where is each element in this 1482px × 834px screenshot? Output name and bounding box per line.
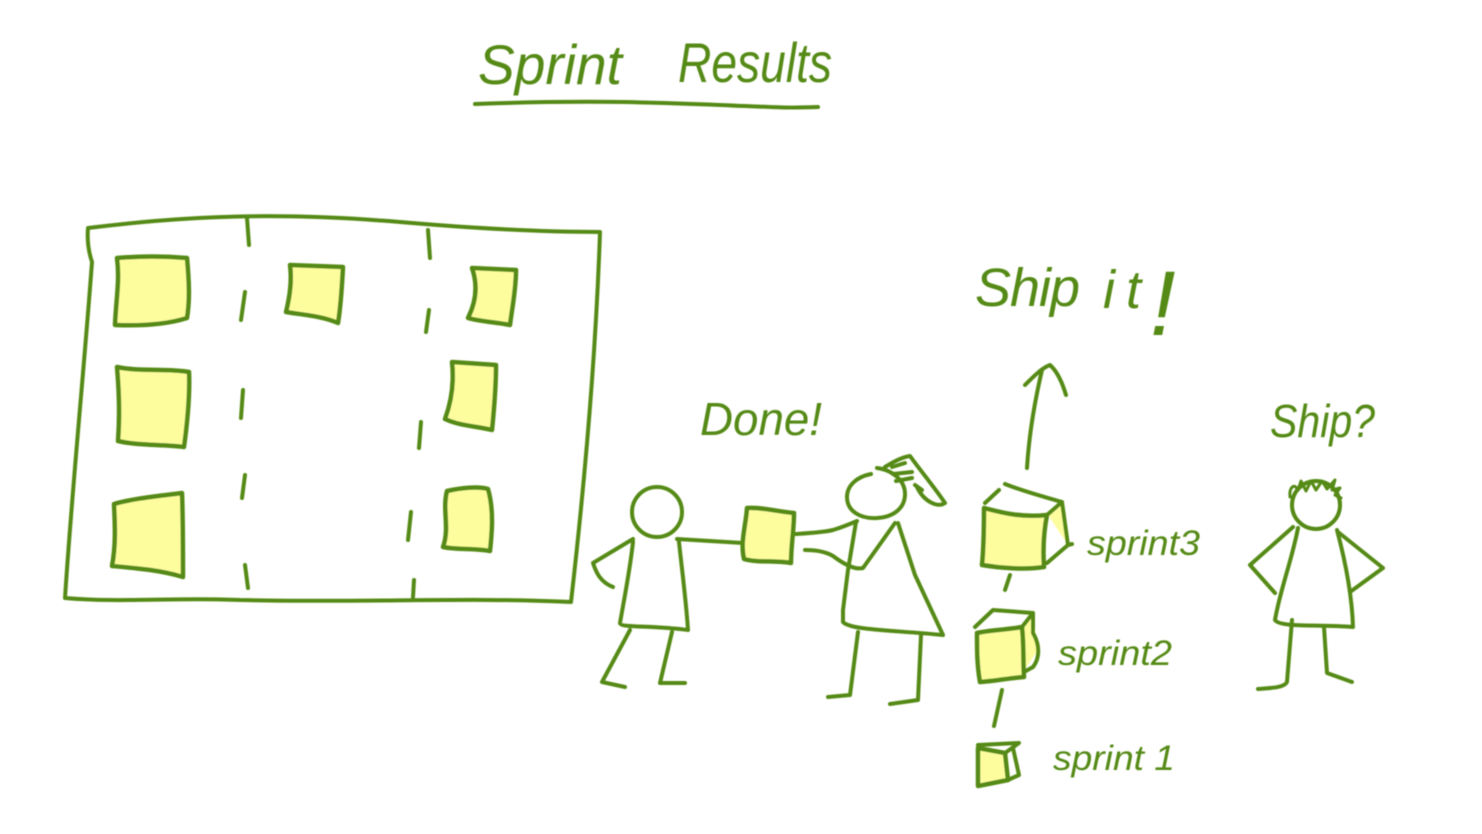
column dividers (241, 218, 430, 597)
increment: sprint 1 (978, 743, 1019, 786)
title: Sprint (478, 33, 624, 96)
increment: sprint 3 (982, 484, 1072, 568)
label: done: Done! (700, 393, 822, 445)
sticky note: column 1 row 3 (112, 493, 183, 577)
label: sprint 2: sprint2 (1058, 634, 1172, 673)
label: ship question: Ship? (1270, 395, 1375, 447)
sticky note: column 3 row 1 (468, 268, 516, 325)
sticky note: column 3 row 3 (443, 488, 492, 551)
figure: developer handing over (593, 487, 743, 687)
figure: product owner receiving (796, 456, 945, 704)
label: ship it: Ship (975, 258, 1079, 318)
panel: task board (65, 216, 600, 602)
sticky note: column 1 row 2 (117, 367, 189, 447)
label: ship it: it (1103, 260, 1152, 320)
arrow: up to shipping (1025, 365, 1066, 468)
dash between sprint 3 and 2 (1005, 575, 1010, 590)
title (475, 31, 832, 108)
board outline (65, 216, 600, 602)
label: ship it: ! (1150, 253, 1176, 355)
sticky note: column 3 row 2 (445, 362, 496, 430)
dash between sprint 2 and 1 (994, 690, 1002, 726)
increment: sprint 2 (975, 610, 1038, 682)
label: sprint 3: sprint3 (1087, 524, 1201, 563)
sticky note: handed over (743, 508, 794, 563)
label: sprint 1: sprint 1 (1053, 739, 1175, 778)
sticky note: column 1 row 1 (115, 256, 189, 325)
sticky note: column 2 (286, 265, 343, 323)
title: Results (678, 31, 832, 94)
figure: stakeholder (1250, 480, 1383, 689)
